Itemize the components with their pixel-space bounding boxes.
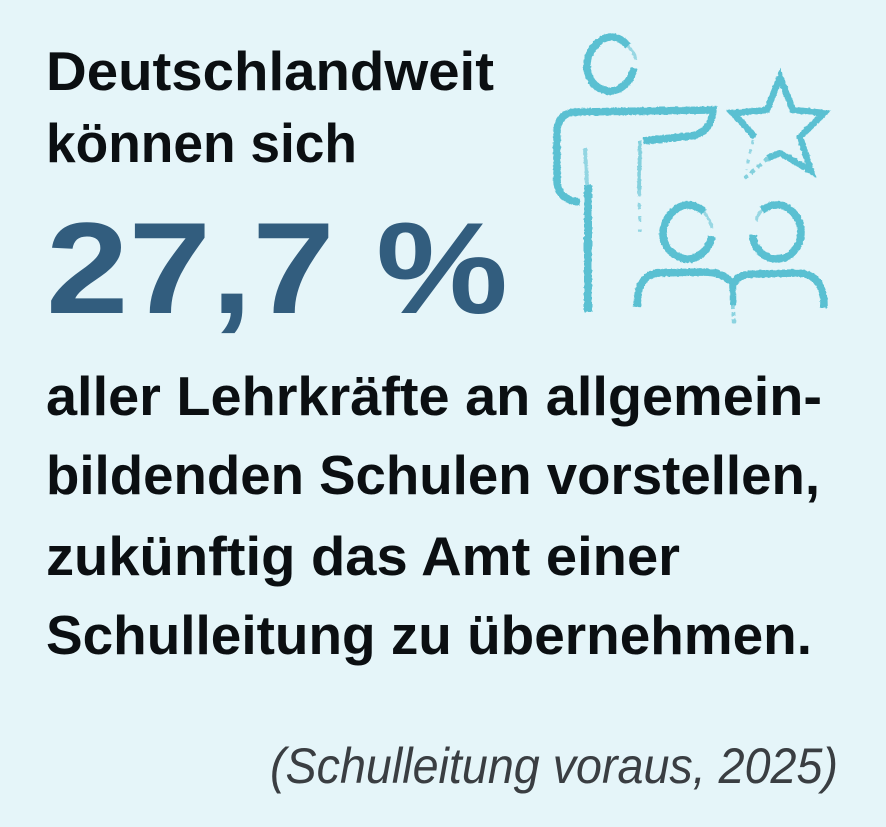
icon: star — [733, 77, 824, 178]
key figure: 27,7 %: 27,7 % — [46, 195, 508, 341]
body text: bildenden Schulen vorstellen, — [46, 444, 820, 506]
heading: intro text: Deutschlandweit — [46, 40, 494, 102]
heading: intro text: können sich — [46, 112, 357, 174]
icon: left student — [637, 205, 733, 307]
body text: Schulleitung zu übernehmen. — [46, 604, 812, 666]
body text — [46, 365, 822, 666]
body text: aller Lehrkräfte an allgemein- — [46, 365, 822, 427]
body text: zukünftig das Amt einer — [46, 525, 680, 587]
heading: intro text — [46, 40, 494, 174]
icon: right student — [733, 205, 824, 326]
icon: teacher with star and two students — [557, 37, 824, 326]
source citation: (Schulleitung voraus, 2025) — [270, 738, 838, 794]
icon: teacher — [557, 37, 713, 312]
